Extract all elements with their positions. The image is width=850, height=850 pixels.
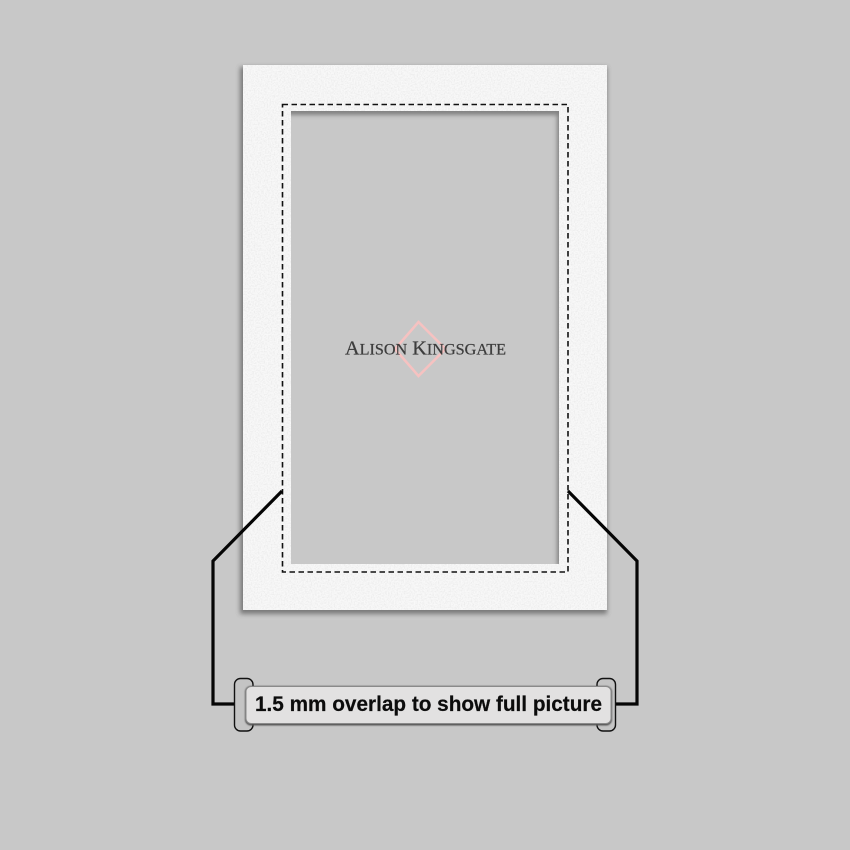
window inner shadow <box>285 104 566 566</box>
left bracket tab <box>234 678 253 731</box>
callout <box>234 678 616 731</box>
mat board shadow <box>240 67 607 614</box>
logo <box>345 322 506 376</box>
window opening <box>291 111 559 564</box>
logo wordmark: ALISON KINGSGATE <box>345 338 506 360</box>
left leader line <box>213 491 282 704</box>
panel: white mat board with window <box>243 65 607 610</box>
label text: 1.5 mm overlap to show full picture <box>255 692 602 716</box>
logo diamond <box>395 322 446 376</box>
dashed overlap line <box>282 104 568 572</box>
label shadow <box>245 686 612 726</box>
infographic canvas <box>211 64 639 732</box>
right leader line <box>568 491 637 704</box>
label plate <box>246 686 611 724</box>
mat board <box>243 65 607 610</box>
right bracket tab <box>597 678 616 731</box>
